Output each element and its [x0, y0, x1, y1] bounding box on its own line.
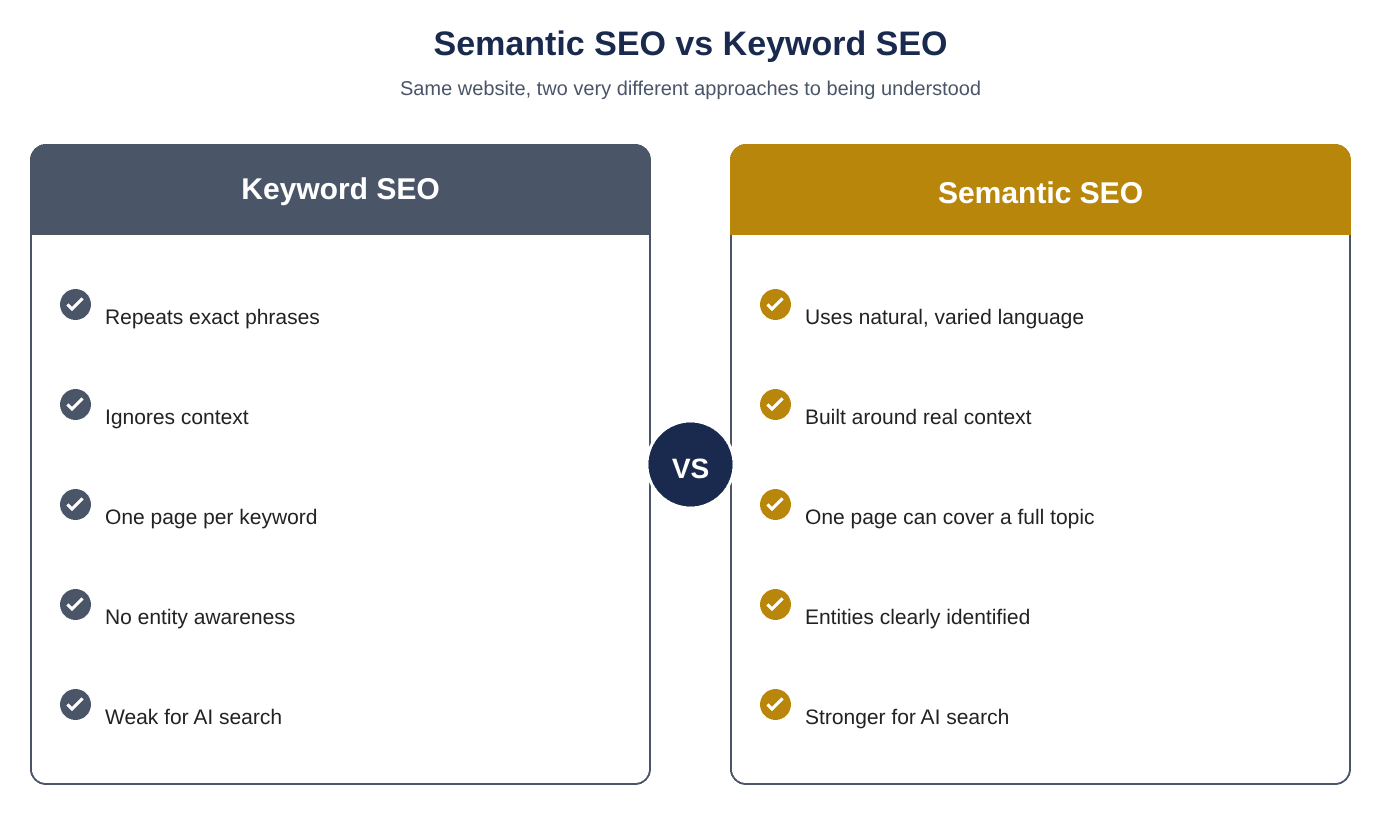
subtitle: Same website, two very different approaches to being understood [400, 78, 981, 100]
item: entities clearly identified: Entities clearly identified [805, 606, 1030, 629]
panel heading: Semantic SEO [938, 177, 1143, 210]
item: ignores context [60, 389, 249, 429]
item: weak for AI search: Weak for AI search [105, 706, 282, 729]
item: entities clearly identified [760, 589, 1030, 629]
item: uses natural, varied language [760, 289, 1084, 329]
item: one page per keyword [60, 489, 317, 529]
panel: keyword SEO [30, 144, 651, 784]
item: ignores context: Ignores context [105, 406, 249, 429]
item: stronger for AI search [760, 689, 1009, 729]
item: one page can cover a full topic: One page can cover a full topic [805, 506, 1095, 529]
title: Semantic SEO vs Keyword SEO [434, 25, 947, 63]
panel outline [31, 145, 650, 784]
panel header [730, 144, 1351, 235]
VS badge: VS [672, 453, 709, 484]
item: one page per keyword: One page per keyword [105, 506, 317, 529]
item: uses natural, varied language: Uses natural, varied language [805, 306, 1084, 329]
item: one page can cover a full topic [760, 489, 1095, 529]
item: repeats exact phrases [60, 289, 320, 329]
item: repeats exact phrases: Repeats exact phrases [105, 306, 320, 329]
item: stronger for AI search: Stronger for AI search [805, 706, 1009, 729]
item: built around real context: Built around real context [805, 406, 1032, 429]
panel header [30, 144, 651, 235]
item: no entity awareness: No entity awareness [105, 606, 295, 629]
item: no entity awareness [60, 589, 295, 629]
panel outline [731, 145, 1350, 784]
panel heading: Keyword SEO [241, 173, 440, 206]
item: built around real context [760, 389, 1032, 429]
item: weak for AI search [60, 689, 282, 729]
panel: semantic SEO [730, 144, 1351, 784]
VS badge [647, 421, 734, 508]
